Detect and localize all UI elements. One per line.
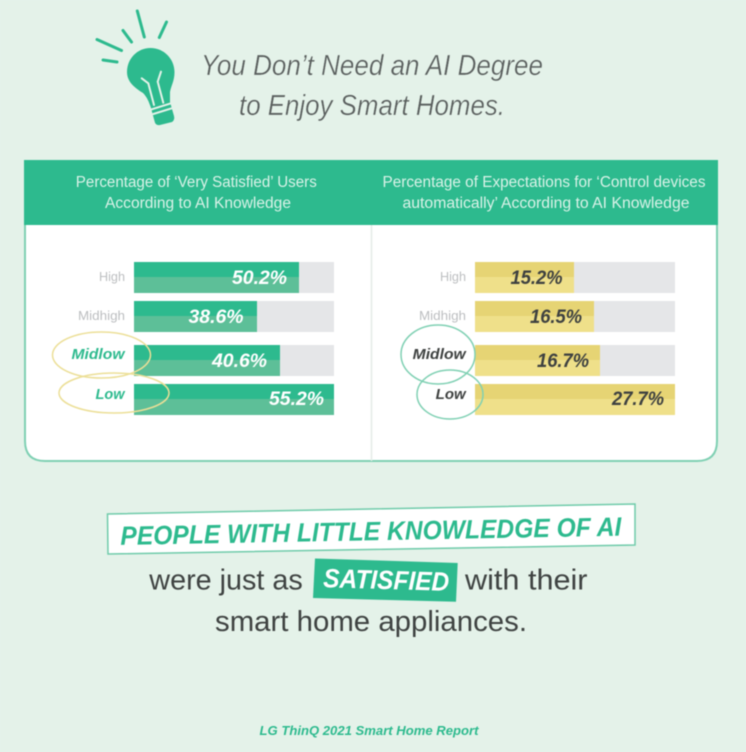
callout: people with little knowledge of AI: PEOPLE WITH LITTLE KNOWLEDGE OF AI	[120, 512, 622, 551]
bar chart: very satisfied users: 38.6%	[188, 306, 244, 328]
bar chart: expectations for automatic control: 16.5%	[530, 306, 582, 328]
icon: light bulb	[97, 11, 174, 125]
bar chart: expectations for automatic control: Midlow	[413, 347, 468, 363]
text: conclusion line two: smart home appliances.	[215, 606, 527, 638]
heading: right chart: automatically’ According to AI Knowledge	[402, 195, 690, 212]
heading: left chart	[76, 174, 317, 212]
heading: right chart: Percentage of Expectations for ‘Control devices	[382, 174, 706, 191]
source note: LG ThinQ 2021 Smart Home Report	[260, 723, 479, 738]
bar chart: very satisfied users: High	[99, 269, 125, 284]
heading: right chart	[382, 174, 706, 212]
bar chart: expectations for automatic control: High	[440, 269, 466, 284]
bar chart: very satisfied users: Midlow	[72, 347, 126, 363]
title	[201, 50, 543, 122]
bar chart: very satisfied users: Midhigh	[78, 308, 125, 323]
bar chart: expectations for automatic control	[401, 262, 675, 419]
text: conclusion line one	[148, 558, 588, 602]
panel: charts card	[24, 160, 718, 461]
heading: left chart: According to AI Knowledge	[105, 195, 291, 212]
bar chart: very satisfied users	[52, 262, 334, 415]
bar chart: very satisfied users: 50.2%	[232, 267, 287, 289]
bar chart: expectations for automatic control: Low	[436, 387, 467, 403]
bar chart: expectations for automatic control: 15.2%	[510, 267, 562, 289]
title: You Don’t Need an AI Degree	[201, 50, 543, 82]
bar chart: expectations for automatic control: 16.7%	[537, 350, 589, 372]
text: conclusion line one: were just as	[148, 564, 303, 596]
text: conclusion line one: SATISFIED	[323, 563, 450, 597]
heading: left chart: Percentage of ‘Very Satisfied’ Users	[76, 174, 317, 191]
bar chart: expectations for automatic control: Midhigh	[419, 308, 466, 323]
title: to Enjoy Smart Homes.	[239, 90, 505, 122]
bar chart: very satisfied users: 40.6%	[211, 350, 267, 372]
bar chart: expectations for automatic control: 27.7%	[611, 388, 664, 410]
bar chart: very satisfied users: Low	[96, 387, 126, 403]
text: conclusion line one: with their	[464, 564, 588, 596]
bar chart: very satisfied users: 55.2%	[269, 388, 324, 410]
